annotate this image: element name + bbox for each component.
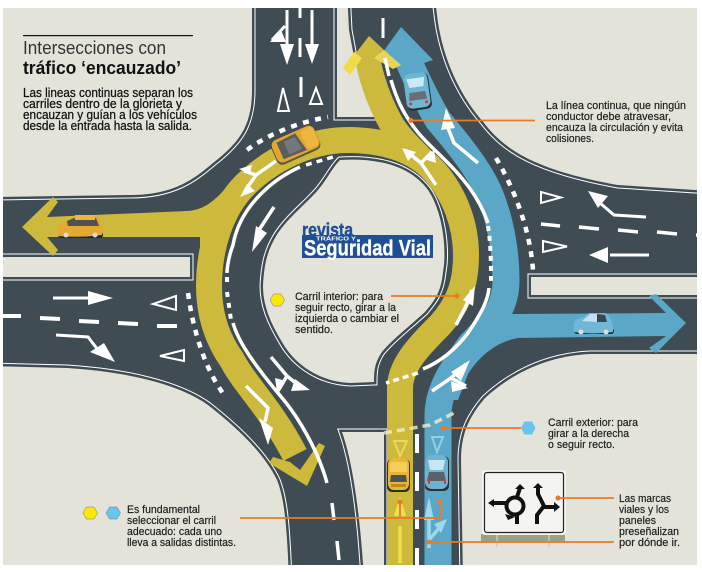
intro text: encauzan y guían a los vehículos [23, 108, 197, 122]
callout: carril interior: sentido. [295, 324, 333, 336]
callout: seleccionar el carril: seleccionar el carril [127, 515, 216, 527]
car: yellow top view [387, 458, 410, 492]
road markings [3, 8, 702, 362]
intro text: Las lineas continuas separan los [23, 86, 193, 100]
callout: línea continua [408, 100, 686, 145]
callout: seleccionar el carril: Es fundamental [127, 504, 200, 516]
road sign [481, 470, 566, 547]
yellow lane: inner carriageway [22, 36, 466, 572]
callout: seleccionar el carril: lleva a salidas distintas. [127, 537, 236, 549]
callout: carril interior: Carril interior: para [295, 291, 384, 303]
callout: carril interior: izquierda o cambiar el [295, 313, 399, 325]
arrow: bottom exit head [269, 443, 325, 486]
car: yellow side view [58, 215, 103, 238]
callout: seleccionar el carril: adecuado: cada uno [127, 526, 222, 538]
callout: carril interior [270, 291, 460, 336]
arrow: left exit [22, 190, 224, 256]
title: tráfico ‘encauzado’ [23, 58, 181, 78]
logo: revista Tráfico y Seguridad Vial: Seguridad Vial [304, 236, 431, 260]
logo: revista Tráfico y Seguridad Vial [302, 220, 433, 260]
callout: marcas viales y paneles: preseñalizan [619, 526, 679, 538]
callout: carril exterior [440, 417, 639, 451]
callout: marcas viales y paneles: Las marcas [619, 493, 671, 505]
callout: carril exterior: Carril exterior: para [548, 417, 639, 429]
callout: línea continua: La línea continua, que ningún [546, 100, 686, 112]
callout: carril exterior: o seguir recto. [548, 439, 615, 451]
callout: marcas viales y paneles: viales y los [619, 504, 669, 516]
title [23, 35, 193, 78]
intro text [23, 86, 197, 133]
callout: marcas viales y paneles: por dónde ir. [619, 537, 680, 549]
logo: revista Tráfico y Seguridad Vial: TRÁFICO Y [316, 236, 356, 242]
title: Intersecciones con [23, 38, 166, 58]
car: blue side view [574, 313, 614, 334]
callout: marcas viales y paneles: paneles [619, 515, 656, 527]
logo: revista Tráfico y Seguridad Vial: revista [302, 220, 354, 240]
car: blue angled top [403, 71, 433, 111]
callout: marcas viales y paneles [426, 493, 680, 549]
callout: línea continua: conductor debe atravesar, [546, 111, 671, 123]
car: yellow angled [271, 126, 320, 165]
callout: carril exterior: girar a la derecha [548, 428, 630, 440]
callout: línea continua: encauza la circulación y evita [546, 122, 684, 134]
lane dividers [188, 58, 533, 565]
lane arrows in roundabout [239, 108, 478, 445]
callout: línea continua: colisiones. [546, 133, 594, 145]
bottom lane pale markings [394, 437, 447, 563]
blue lane: outer carriageway [374, 27, 686, 572]
callout: carril interior: seguir recto, girar a la [295, 302, 397, 314]
car: blue top view [425, 455, 449, 491]
callout: seleccionar el carril [83, 500, 442, 549]
intro text: desde la entrada hasta la salida. [23, 119, 192, 133]
intro text: carriles dentro de la glorieta y [23, 97, 183, 111]
